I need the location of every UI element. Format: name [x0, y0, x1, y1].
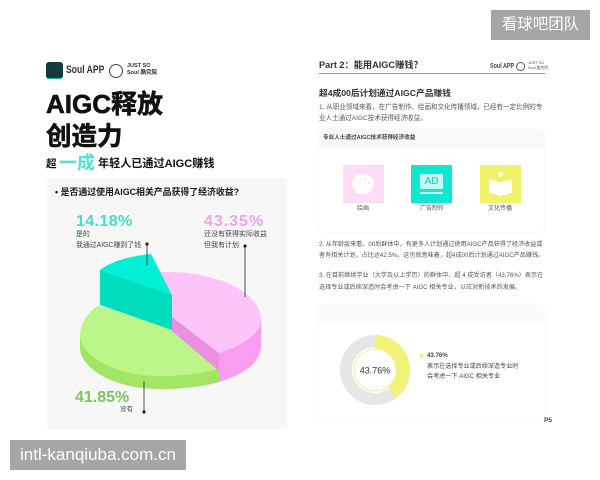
- screen base: [420, 192, 443, 194]
- watermark: bottom left: intl-kanqiuba.com.cn: [20, 445, 176, 464]
- small wordmark: [528, 61, 548, 70]
- value: 41.85%: [75, 389, 129, 406]
- pie chart: [80, 242, 261, 414]
- paragraph 2: [319, 240, 544, 259]
- paragraph 2: 2. 从年龄层来看，00后群体中，有更多人计划通过使用AIGC产品获得了经济收益或: [319, 241, 542, 248]
- paragraph 2: 者有相关计划，占比达42.5%。这也就意味着，超4成00后计划通过AIGC产品赚钱。: [319, 252, 544, 259]
- caption: 还没有获得实际收益: [204, 231, 267, 238]
- highlight: 一成: 一成: [59, 153, 95, 173]
- title line 2: 创造力: [46, 123, 123, 151]
- caption: 是的: [76, 231, 90, 238]
- caption: [76, 230, 141, 248]
- icon: advertising: [411, 165, 452, 203]
- small wordmark: Soul 酷究院: [528, 66, 548, 70]
- paragraph 1: [319, 103, 542, 122]
- caption: [204, 230, 267, 248]
- legend: [420, 352, 518, 380]
- watermark: top right: [491, 10, 590, 40]
- paragraph 3: [319, 271, 543, 291]
- title line 1: AIGC释放: [46, 89, 163, 119]
- header: Part 2: [319, 59, 545, 74]
- icon: JustSo ring small: [516, 62, 525, 71]
- value: 43.35%: [204, 213, 264, 230]
- label: painting: 绘画: [357, 206, 369, 212]
- section heading: 超4成00后计划通过AIGC产品赚钱: [319, 88, 451, 98]
- title: [46, 89, 163, 151]
- palette dots: [359, 178, 361, 180]
- logos: Soul APP: [490, 61, 514, 70]
- label: advertising: 广告制作: [420, 206, 444, 212]
- subtitle text: 年轻人已通过AIGC赚钱: [98, 158, 214, 170]
- card header: [319, 130, 544, 147]
- legend text: 43.76%: [427, 352, 448, 359]
- page number: P5: [544, 417, 552, 424]
- paragraph 3: 3. 在目前继续学业（大学及以上学历）的群体中，超 4 成受访者（43.76%）表示在: [319, 272, 543, 279]
- slice: green: [80, 306, 219, 389]
- caption: 但我有计划: [204, 242, 239, 248]
- paragraph 1: 业人士通过AIGC技术获得经济收益。: [319, 114, 427, 122]
- donut chart: [340, 335, 410, 405]
- Soul APP wordmark: Soul APP: [66, 64, 104, 76]
- AD screen: [420, 174, 443, 189]
- icon: culture: [480, 165, 521, 203]
- subtitle prefix: 超: [46, 158, 56, 170]
- JustSo wordmark: JUST SO: [127, 63, 151, 69]
- label: 41.85%: [75, 389, 133, 413]
- JustSo wordmark: Soul 酷究院: [127, 70, 157, 76]
- legend marker: [420, 354, 423, 357]
- legend text: 表示在选择专业或后续深造专业时: [427, 362, 518, 370]
- icon: Soul APP logo: [46, 62, 63, 79]
- label: culture: 文化传播: [488, 206, 512, 212]
- label: 43.35%: [204, 213, 267, 248]
- paragraph 3: 选择专业或后续深造时会考虑一下 AIGC 相关专业，以应对新技术的发展。: [319, 284, 521, 291]
- question: • 是否通过使用AIGC相关产品获得了经济收益?: [55, 187, 239, 197]
- JustSo wordmark: [127, 63, 157, 76]
- watermark: bottom left: [10, 440, 186, 470]
- slice: teal: [100, 254, 172, 330]
- card title: 专业人士通过AIGC技术获得经济收益: [323, 135, 415, 141]
- reader head: [498, 172, 503, 177]
- caption: 我通过AIGC赚到了钱: [76, 242, 141, 248]
- heading: Part 2：能用AIGC赚钱？: [319, 60, 423, 70]
- panel: pie chart card: [47, 178, 287, 429]
- slice: pink: [160, 272, 261, 382]
- legend text: [427, 352, 518, 380]
- legend text: 会考虑一下 AIGC 相关专业: [427, 373, 500, 380]
- book: [489, 179, 512, 196]
- card header: [319, 305, 544, 322]
- small wordmark: JUST SO: [528, 61, 544, 65]
- label: 14.18%: [76, 213, 141, 248]
- AD screen: AD: [425, 176, 438, 187]
- leader lines: [143, 243, 246, 413]
- subtitle: [46, 153, 214, 173]
- caption: 没有: [120, 406, 133, 413]
- palette: [352, 174, 374, 194]
- donut chart: 43.76%: [360, 366, 390, 376]
- watermark: top right: 看球吧团队: [502, 16, 579, 33]
- panel: donut card: [319, 305, 544, 419]
- value: 14.18%: [76, 213, 133, 230]
- icon: JustSo ring: [109, 64, 123, 78]
- paragraph 1: 1. 从职业领域来看，在广告制作、绘画和文化传播领域，已经有一定比例的专: [319, 104, 542, 111]
- icon: painting: [343, 165, 384, 203]
- panel: professions card: [323, 134, 521, 210]
- logo: Soul APP and JustSo: [46, 62, 157, 79]
